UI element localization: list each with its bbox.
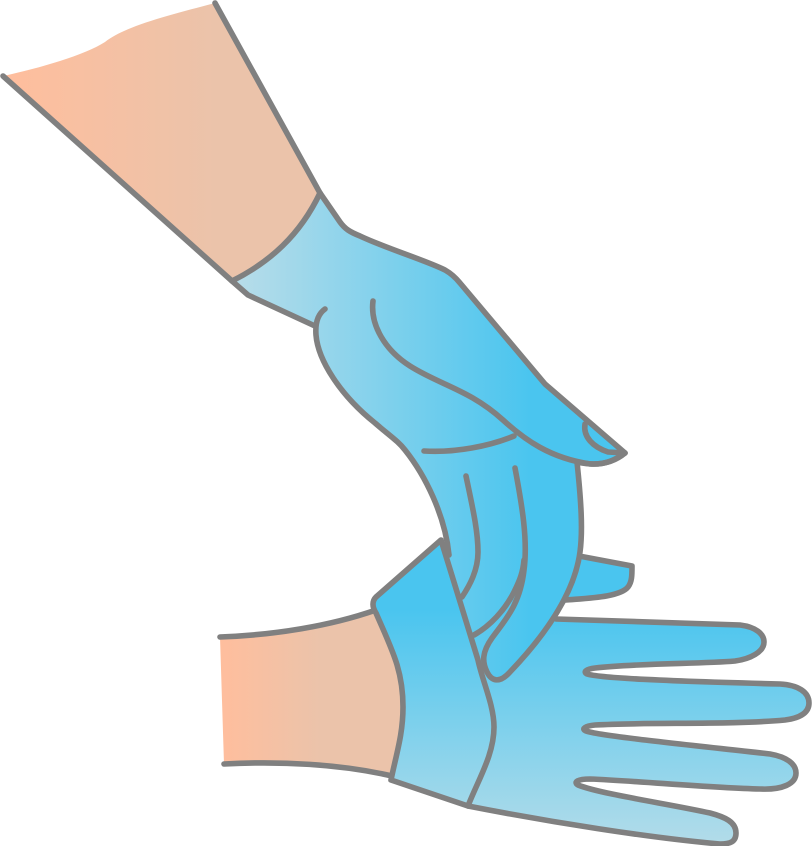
glove cuff edge <box>232 193 320 326</box>
lower hand thumb <box>560 556 632 600</box>
thumbnail <box>585 424 625 453</box>
lower arm <box>220 610 420 776</box>
thumb crease <box>373 301 625 464</box>
palm lower edge <box>316 309 449 555</box>
upper arm <box>3 3 320 281</box>
glove outline <box>320 193 625 680</box>
lower glove cuff <box>373 540 494 806</box>
upper glove hand <box>232 193 625 680</box>
lower glove hand with fingers <box>440 600 809 844</box>
finger crease 2 <box>474 560 524 635</box>
finger crease 1 <box>462 476 478 597</box>
knuckle crease <box>424 436 514 451</box>
